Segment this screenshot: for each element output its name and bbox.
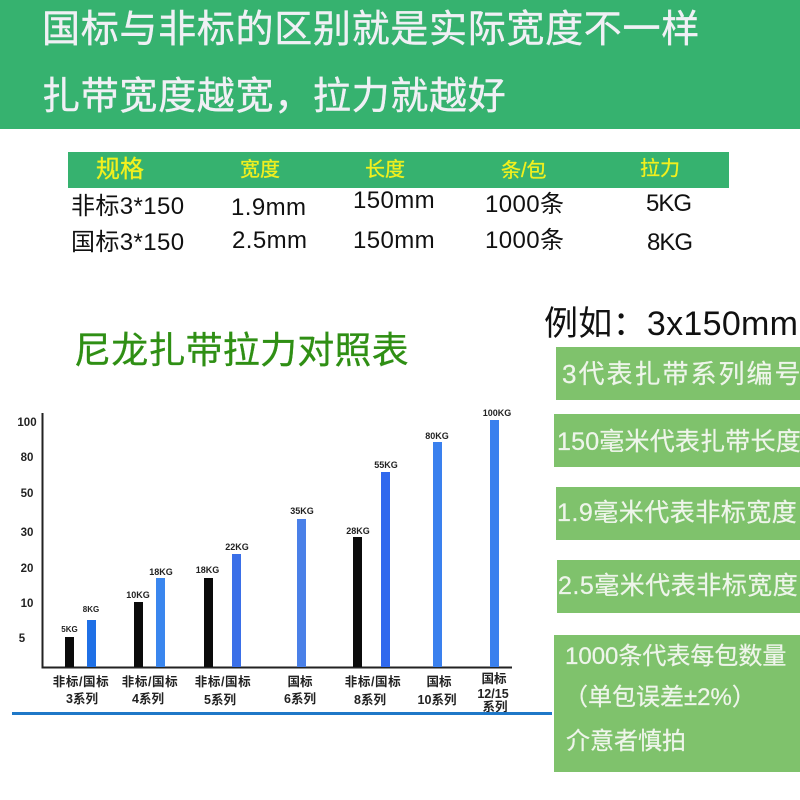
note: pack quantity: 1000条代表每包数量 [565,643,786,670]
y axis labels: 10 [21,598,33,610]
row: national standard [71,227,692,256]
x axis labels: 5系列 [204,692,236,707]
row: non-standard: 5KG [646,190,691,217]
bars: 10 series: 80KG [425,431,449,441]
bars: 8 series: 28KG [346,526,370,536]
header: width: 宽度 [240,159,280,181]
x axis labels: 国标 [426,674,452,689]
note: non-standard width: 1.9毫米代表非标宽度 [557,499,797,527]
bars: 3 series: 8KG [83,605,99,614]
x axis labels: 非标/国标 [122,674,178,689]
example heading: 例如：3x150mm [544,305,798,343]
x axis labels: 3系列 [66,691,98,706]
y axis labels: 80 [21,452,33,464]
note: length [554,414,800,467]
banner line 2: 扎带宽度越宽，拉力就越好 [42,76,506,118]
y axis labels: 50 [21,488,33,500]
note: pack quantity: 介意者慎拍 [566,728,686,755]
note: pack quantity: （单包误差±2%） [564,684,756,711]
x axis labels: 12/15 [477,687,509,701]
bars: 3 series: 5KG [61,625,78,634]
note: pack quantity [554,635,800,772]
x axis labels [53,671,509,714]
row: non-standard: 非标3*150 [71,193,185,220]
y axis labels: 30 [21,527,33,539]
x axis labels: 非标/国标 [345,674,401,689]
note: standard width [557,560,800,613]
note: series: 3代表扎带系列编号 [562,359,800,389]
bars: 5 series: 22KG [225,542,249,552]
y axis labels: 5 [19,633,26,645]
header: spec: 规格 [96,156,144,183]
x axis labels: 10系列 [418,692,456,707]
header: tension: 拉力 [640,158,680,180]
banner line 1: 国标与非标的区别就是实际宽度不一样 [42,9,700,51]
y axis labels [17,417,37,645]
bars: 8 series: 55KG [374,460,398,470]
row: national standard: 150mm [353,227,435,254]
y axis labels: 20 [21,563,33,575]
x axis labels: 8系列 [354,692,386,707]
x axis labels: 6系列 [284,691,316,706]
y axis labels: 100 [17,417,37,429]
blue divider line [12,712,552,715]
row: national standard: 2.5mm [232,227,307,254]
header: per pack: 条/包 [501,160,547,182]
row: national standard: 1000条 [485,227,564,254]
bars: 3 series [61,605,99,667]
x axis labels: 非标/国标 [195,674,251,689]
x axis labels: 系列 [482,699,508,714]
x axis labels: 4系列 [132,691,164,706]
x axis labels: 非标/国标 [53,674,109,689]
row: national standard: 国标3*150 [71,229,185,256]
bars: 12/15 series: 100KG [483,408,511,418]
chart title: 尼龙扎带拉力对照表 [74,330,409,371]
banner [0,0,800,129]
table [68,152,729,256]
bars: 5 series: 18KG [196,565,219,575]
note: series [556,347,800,400]
x axis labels: 国标 [481,671,507,686]
table header bar [68,152,729,188]
bars: 10 series [425,431,449,667]
bars: 5 series [196,542,249,667]
note: non-standard width [556,487,800,540]
note: standard width: 2.5毫米代表非标宽度 [558,572,798,600]
row: non-standard: 1000条 [485,191,564,218]
row: national standard: 8KG [647,229,692,256]
bars: 6 series [290,506,314,667]
bars: 4 series [126,567,173,667]
bar chart [12,408,552,715]
note: length: 150毫米代表扎带长度 [557,428,800,456]
bars: 12/15 series [483,408,511,667]
row: non-standard [71,187,691,221]
bars: 4 series: 10KG [126,590,150,600]
bars: 8 series [346,460,398,667]
axes [42,413,512,668]
bars: 4 series: 18KG [149,567,173,577]
header: length: 长度 [365,159,405,181]
row: non-standard: 1.9mm [231,194,306,221]
x axis labels: 国标 [287,674,313,689]
bars: 6 series: 35KG [290,506,314,516]
row: non-standard: 150mm [353,187,435,214]
